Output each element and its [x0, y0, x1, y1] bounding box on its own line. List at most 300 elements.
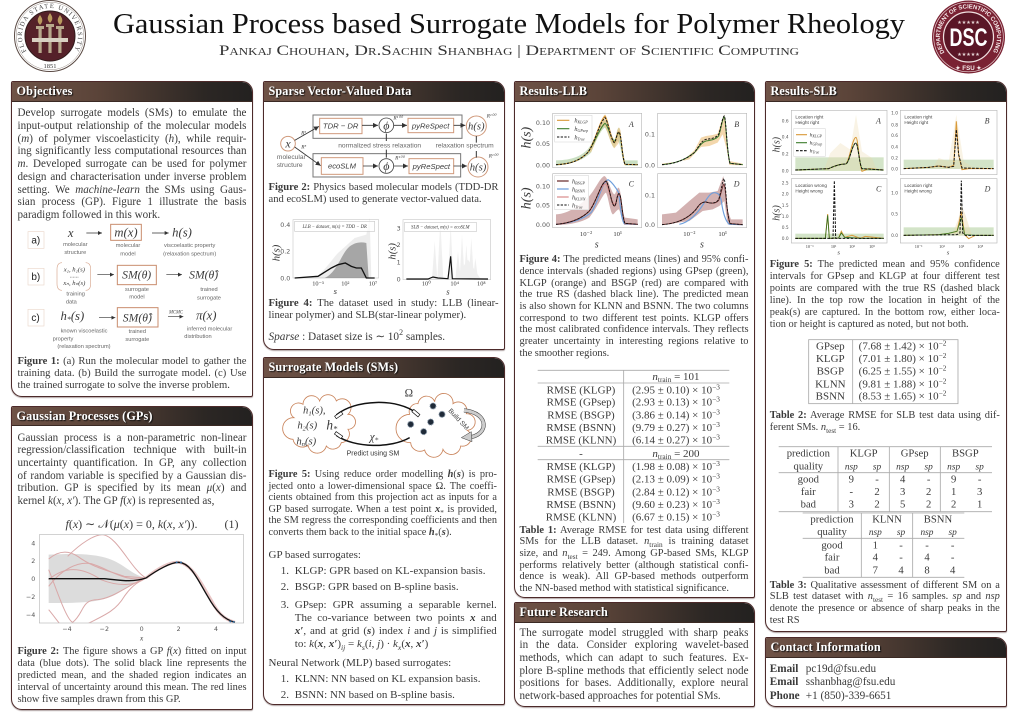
caption: figure 5 SLB: tion or height is captured as noted, but not both.	[770, 318, 969, 330]
table 3: qualitative assessment: -	[899, 552, 903, 563]
table 3: qualitative assessment: 2	[874, 499, 879, 510]
table 3: qualitative assessment: -	[950, 540, 954, 551]
figure 1: surrogate workflow diagram: structure	[64, 250, 86, 256]
figure 1: surrogate workflow diagram: model	[120, 251, 136, 257]
charts: LLB predictions A-D: 0.00	[536, 222, 550, 229]
caption: figure 2 GP: predicted mean, and the shaded region indicates an	[18, 670, 246, 680]
chart: GP fit with samples: 2	[31, 558, 35, 565]
caption: figure 5 surrogate: the SM regress the corresponding coefficients and then	[268, 515, 497, 526]
charts: SLB predictions A-D: 0.5	[781, 224, 788, 230]
charts: LLB and SLB datasets: 1	[396, 259, 400, 266]
heading: Objectives	[12, 82, 252, 102]
caption: figure 1: the trained surrogate to solve the inverse problem.	[18, 380, 230, 391]
table 1: RMSE for LLB: −3	[712, 432, 720, 441]
equation 1: f(x) ∼ 𝒩(μ(x) = 0, k(x, x′)).	[66, 516, 197, 530]
table 1: RMSE for LLB: −3	[712, 382, 720, 391]
text: kernel formula: to: k(x, x′)ij = ks(i, j) · kx(x, x′)	[295, 638, 428, 652]
caption: figure 4 LLB results: is also shown for KLNN and BSNN. The two columns	[520, 301, 748, 312]
caption: figure 4 LLB results: Figure 4: The predicted means (lines) and 95% confi-	[520, 254, 748, 265]
legend: panel A	[555, 115, 592, 142]
figure 1: surrogate workflow diagram: surrogate	[125, 337, 149, 343]
charts: LLB predictions A-D: 0.1	[645, 192, 655, 199]
text: neural network surrogates list: BSNN: NN based on B-spline basis.	[295, 689, 455, 701]
heading: Contact Information: Contact Information	[770, 640, 881, 654]
caption: figure 1: Figure 1: (a) Run the molecular model to gather the	[18, 356, 246, 366]
table 3: qualitative assessment: sp	[924, 462, 933, 472]
caption: table 1: dence is weak). All GP-based methods outperform	[520, 571, 748, 582]
chart: GP fit with samples	[26, 534, 244, 641]
charts: SLB predictions A-D: 0.0	[781, 168, 788, 174]
figure 1: surrogate workflow diagram: SM(θ̂)	[123, 311, 153, 324]
figure 1: surrogate workflow diagram: molecular	[116, 243, 140, 249]
table 3: qualitative assessment: 4	[898, 565, 904, 576]
table 3: qualitative assessment: 2	[950, 499, 956, 510]
table 1: RMSE for LLB: RMSE (BSGP)	[547, 409, 615, 421]
charts: LLB and SLB datasets: 10⁷	[368, 280, 377, 287]
figure 2: physics based molecular model pipeline: pyReSpect	[411, 162, 450, 171]
text: GP description	[18, 432, 246, 507]
charts: SLB predictions A-D: 1.5	[781, 202, 788, 208]
charts: SLB predictions A-D: 0.0	[781, 235, 788, 241]
text: future research: positions for bases. Additionally, explore neural	[520, 677, 748, 689]
heading: Results-SLB	[766, 82, 1006, 102]
table 1: RMSE for LLB: n	[653, 448, 659, 460]
table 3: qualitative assessment: 4	[899, 474, 905, 485]
figure 5: reduced order modelling clouds: (s),	[311, 406, 325, 417]
text: future research: methods, which can adapt to such features. Ex-	[520, 652, 748, 664]
legend: panel A: h	[809, 140, 812, 146]
table 3: qualitative assessment: 9	[848, 474, 853, 485]
legend: panel A: h	[574, 126, 578, 133]
logo: Department of Scientific Computing seal	[932, 0, 1005, 74]
figure 1: surrogate workflow diagram: property	[52, 336, 73, 342]
table 3: qualitative assessment: good	[797, 474, 819, 485]
table 3: qualitative assessment: nsp	[896, 462, 909, 472]
legend: panel A: GPsep	[812, 142, 822, 146]
table 2: RMSE for SLB: (9.81 ± 1.88) × 10	[858, 378, 938, 390]
table 3: qualitative assessment: 1	[950, 487, 956, 498]
caption: figure 1	[18, 356, 246, 391]
caption: figure 2 pipeline	[268, 182, 498, 205]
text: GP description: Gaussian process is a non-parametric non-linear	[18, 432, 246, 444]
logo: Department of Scientific Computing seal: ✦ FSU ✦	[955, 65, 982, 72]
figure 5: reduced order modelling clouds: *	[374, 435, 378, 444]
table 3: qualitative assessment: 1	[976, 499, 982, 510]
charts: SLB predictions A-D: Location right	[904, 114, 932, 119]
text: GP description: tribution. GP is specified by its mean μ(x) and	[18, 482, 246, 494]
figure 1: surrogate workflow diagram: SM(θ̂)	[189, 268, 219, 281]
table 3: qualitative assessment: nsp	[844, 462, 858, 472]
charts: SLB predictions A-D: 10¹	[830, 243, 837, 248]
heading: Future Research	[515, 603, 754, 622]
charts: SLB predictions A-D	[772, 110, 998, 256]
table 1: RMSE for LLB: (6.14 ± 0.27) × 10	[632, 434, 712, 446]
legend: panel A	[793, 128, 825, 156]
figure 5: reduced order modelling clouds: Ω	[404, 388, 413, 400]
panel: Results-SLB	[765, 81, 1007, 632]
text: GP based surrogates list: x′, and at grid (s) index i and j is simplified	[295, 624, 497, 636]
caption: figure 2 GP: interval of uncertainty around this mean. The red lines	[18, 682, 246, 692]
table 3: qualitative assessment: prediction	[810, 514, 854, 525]
charts: SLB predictions A-D: 0.2	[781, 151, 788, 157]
caption: figure 1: training data. (b) Build the surrogate model. (c) Use	[18, 368, 246, 379]
charts: SLB predictions A-D: B	[984, 116, 989, 125]
figure 1: surrogate workflow diagram: surrogate	[197, 295, 221, 301]
panel: Sparse Vector-Valued Data	[263, 81, 505, 350]
caption: figure 2 GP: data (blue dots). The solid black line represents the	[18, 658, 246, 668]
charts: SLB predictions A-D: 1.0	[891, 110, 898, 116]
figure 2: physics based molecular model pipeline: ecoSLM	[327, 161, 356, 170]
caption: figure 5 SLB: line). In the top row the location in height of the	[770, 294, 1000, 306]
figure 2: physics based molecular model pipeline: R¹⁰⁰	[392, 115, 403, 121]
text: GP description: regression/classification technique with built-in	[18, 444, 246, 456]
legend: panel A: GPsep	[578, 128, 588, 133]
table 3: qualitative assessment: sp	[872, 462, 881, 472]
legend: panel C: h	[572, 186, 575, 193]
chart: GP fit with samples: 0	[31, 576, 35, 583]
text: contact details: Email	[770, 676, 798, 688]
table 1: RMSE for LLB: (1.98 ± 0.08) × 10	[632, 461, 712, 473]
legend: panel C: h	[572, 194, 575, 201]
legend: panel A: h	[809, 148, 812, 154]
figure 1: surrogate workflow diagram: xₙ, hₙ(s)	[62, 280, 86, 287]
heading: Results-LLB	[515, 82, 754, 102]
charts: LLB predictions A-D: 0.05	[536, 141, 550, 148]
table 3: qualitative assessment: BSNN	[923, 514, 952, 525]
table 2: RMSE for SLB: −2	[938, 388, 946, 397]
table 2: RMSE for SLB: (7.01 ± 1.80) × 10	[858, 353, 938, 365]
charts: SLB predictions A-D: A	[874, 116, 880, 125]
table 1: RMSE for LLB: RMSE (BSGP)	[547, 486, 615, 498]
text: contact details: Email	[770, 663, 798, 675]
table 1: RMSE for LLB: (2.13 ± 0.09) × 10	[632, 473, 712, 485]
heading: Gaussian Processes: Gaussian Processes (GPs)	[16, 409, 153, 423]
caption: figure 4 LLB results: the smoother regions.	[520, 348, 609, 359]
table 1: RMSE for LLB	[538, 370, 730, 523]
figure 1: surrogate workflow diagram: h	[60, 309, 67, 323]
figure 2: physics based molecular model pipeline: molecular	[276, 154, 306, 161]
figure 1: surrogate workflow diagram: π(x)	[196, 308, 216, 322]
caption: table 3	[770, 580, 1000, 626]
figure 2: physics based molecular model pipeline: R¹⁰⁰	[394, 155, 405, 161]
caption: figure 4 dataset: Figure 4: The dataset used in study: LLB (linear-	[268, 296, 499, 308]
chart: GP fit with samples: −4	[26, 612, 35, 619]
charts: LLB and SLB datasets: 10²	[341, 280, 349, 287]
figure 1: surrogate workflow diagram: training	[66, 291, 85, 297]
table 1: RMSE for LLB: −3	[712, 484, 720, 493]
figure 5: reduced order modelling clouds: (s)	[304, 436, 316, 447]
heading: Sparse Vector-Valued Data: Sparse Vector-Valued Data	[268, 84, 411, 98]
text: objectives paragraph: (m) of polymer viscoelasticity (h), while requir-	[18, 132, 246, 144]
figure 5: reduced order modelling clouds: h	[303, 406, 308, 417]
charts: LLB and SLB datasets: 10⁴	[450, 280, 459, 287]
charts: SLB predictions A-D: Height right	[904, 119, 928, 124]
table 3: qualitative assessment: fair	[824, 552, 839, 563]
table 2: RMSE for SLB: (6.25 ± 1.55) × 10	[858, 365, 938, 377]
table 2: RMSE for SLB: GPsep	[815, 340, 845, 352]
figure 1: surrogate workflow diagram: x	[67, 226, 74, 240]
caption: figure 4 LLB results: KLGP (orange) and BSGP (red) are compared with	[520, 278, 748, 289]
caption: figure 5 SLB: Figure 5: The predicted mean and 95% confidence	[770, 258, 1000, 270]
table 3: qualitative assessment: 7	[872, 565, 878, 576]
charts: SLB predictions A-D: 0.0	[891, 232, 898, 238]
charts: SLB predictions A-D: Location right	[904, 182, 932, 187]
charts: LLB and SLB datasets: 0.2	[280, 248, 290, 255]
chart: GP fit with samples: 4	[31, 540, 35, 547]
table 1: RMSE for LLB: −3	[712, 459, 720, 468]
text: GP based surrogates list: The co-variance between two points x and	[295, 612, 497, 624]
chart: GP fit with samples: 2	[177, 626, 181, 633]
table 2: RMSE for SLB: −2	[938, 351, 946, 360]
charts: SLB predictions A-D: 10⁵	[869, 243, 875, 248]
figure 1: surrogate workflow diagram: (relaxation spectrum)	[57, 344, 111, 350]
figure 1: surrogate workflow diagram: distribution	[184, 334, 212, 340]
heading: Contact Information	[766, 638, 1006, 658]
table 1: RMSE for LLB: (9.60 ± 0.23) × 10	[632, 499, 712, 511]
figure 1: surrogate workflow diagram: trained	[200, 287, 217, 293]
charts: SLB predictions A-D: 0.0	[891, 166, 898, 172]
caption: figure 2 GP: Figure 2: The figure shows a GP f(x) fitted on input	[18, 646, 246, 656]
table 3: qualitative assessment: -	[849, 487, 853, 498]
figure 2: physics based molecular model pipeline: x	[284, 136, 291, 150]
charts: LLB and SLB datasets: h(s)	[271, 244, 282, 261]
charts: LLB and SLB datasets: 10⁻³	[312, 280, 323, 287]
table 2: RMSE for SLB: KLNN	[815, 378, 845, 390]
text: GP based surrogates list: 2.	[281, 581, 289, 593]
heading: Sparse Vector-Valued Data	[264, 82, 504, 102]
figure 1: surrogate workflow diagram: trained	[129, 329, 146, 335]
text: GP based surrogates list: KLGP: GPR based on KL-expansion basis.	[295, 565, 485, 577]
table 2: RMSE for SLB: −2	[938, 376, 946, 385]
charts: SLB predictions A-D: 0.4	[781, 134, 788, 140]
figure 5: reduced order modelling clouds: h	[296, 436, 301, 447]
caption: figure 4 LLB results: correspond to two different test points. KLGP offers	[520, 313, 748, 324]
charts: SLB predictions A-D: Location wrong	[795, 182, 827, 187]
charts: SLB predictions A-D: Height wrong	[904, 188, 932, 193]
charts: LLB and SLB datasets: LLB − dataset, m(x) = TDD − DR	[301, 224, 366, 229]
charts: LLB predictions A-D: 0.10	[536, 120, 550, 127]
table 3: qualitative assessment: 2	[925, 499, 931, 510]
charts: LLB predictions A-D: 0.00	[536, 162, 550, 169]
table 1: RMSE for LLB: = 101	[672, 371, 700, 383]
figure 5: reduced order modelling clouds: 2	[302, 425, 306, 432]
table 3: qualitative assessment: BSGP	[951, 448, 978, 459]
figure 5: reduced order modelling clouds: Build SM	[446, 408, 469, 432]
caption: figure 2 GP: show five samples drawn from this GP.	[18, 694, 181, 704]
panel: Objectives	[11, 81, 253, 397]
table 1: RMSE for LLB: −3	[712, 407, 720, 416]
legend: panel A: KLGP	[811, 134, 822, 138]
text: future research: network-based approaches for potential SMs.	[520, 690, 721, 702]
table 3: qualitative assessment: quality	[817, 526, 847, 537]
figure 1: surrogate workflow diagram	[28, 224, 232, 350]
charts: LLB predictions A-D: 0.0	[645, 222, 655, 229]
table 3: qualitative assessment: KLNN	[872, 514, 902, 525]
figure 2: physics based molecular model pipeline: TDR − DR	[322, 121, 358, 130]
table 3: qualitative assessment: -	[925, 540, 929, 551]
title: Gaussian Process based Surrogate Models for Polymer Rheology	[113, 9, 905, 40]
figure 5: reduced order modelling clouds: Predict using SM	[346, 451, 399, 458]
panel: Surrogate Models	[263, 357, 505, 705]
text: future research: in the data. Consider exploring wavelet-based	[520, 639, 748, 651]
table 3: qualitative assessment: prediction	[786, 448, 830, 459]
caption: table 3: denote the presence or absence of sharp peaks in the	[770, 603, 1000, 614]
figure 1: surrogate workflow diagram: h(s)	[172, 225, 192, 239]
table 1: RMSE for LLB: train	[658, 375, 672, 384]
figure 1: surrogate workflow diagram: model	[129, 294, 145, 300]
caption: figure 5 surrogate: GP based surrogate. When a test point x* is provided,	[268, 504, 497, 517]
caption: figure 5 SLB: peak(s) are captured. In the bottom row, either loca-	[770, 306, 1000, 318]
charts: SLB predictions A-D: Location right	[795, 114, 823, 119]
charts: LLB predictions A-D: 10⁻²	[580, 231, 592, 238]
charts: SLB predictions A-D: 0.2	[891, 155, 898, 161]
heading: Surrogate Models	[264, 358, 504, 378]
text: contact details	[770, 663, 896, 702]
legend: panel C: KLNN	[574, 196, 586, 201]
table 2: RMSE for SLB: (7.68 ± 1.42) × 10	[858, 340, 938, 352]
figure 1: surrogate workflow diagram: inferred molecular	[187, 326, 232, 332]
caption: figure 5 surrogate: Figure 5: Using reduce order modelling h(s) is pro-	[268, 469, 497, 480]
legend: panel A: h	[574, 134, 578, 141]
table 1: RMSE for LLB: n	[653, 371, 659, 383]
table 1: RMSE for LLB: (2.93 ± 0.13) × 10	[632, 396, 712, 408]
table 3: qualitative assessment: 3	[976, 487, 982, 498]
figure 1: surrogate workflow diagram: x₁, h₁(s)	[63, 266, 86, 273]
charts: SLB predictions A-D: 10³	[958, 243, 964, 248]
caption: table 2: ferent SMs. ntest = 16.	[770, 422, 860, 435]
charts: SLB predictions A-D: 10¹	[939, 243, 945, 248]
table 3: qualitative assessment: -	[950, 552, 954, 563]
table 3: qualitative assessment	[778, 446, 992, 578]
heading: Results-SLB: Results-SLB	[770, 84, 837, 98]
panel: Future Research	[514, 602, 755, 707]
logo: Florida State University seal: FLORIDA STATE UNIVERSITY	[18, 4, 82, 54]
caption: figure 4 dataset: linear polymer) and SLB(star-linear polymer).	[268, 308, 466, 320]
table 1: RMSE for LLB: train	[658, 452, 672, 461]
table 2: RMSE for SLB: BSGP	[816, 365, 844, 377]
equation 1: (1)	[224, 516, 238, 530]
charts: LLB predictions A-D: 0.10	[536, 183, 550, 190]
figure 1: surrogate workflow diagram: *	[67, 315, 71, 324]
table 1: RMSE for LLB: RMSE (KLGP)	[547, 461, 616, 473]
caption: figure 4 LLB results: the most calibrated confidence intervals. They reflects	[520, 324, 748, 335]
figure 1: surrogate workflow diagram: known viscoelastic	[60, 328, 107, 334]
charts: LLB and SLB datasets: SLB − dataset, m(x) = ecoSLM	[411, 225, 470, 230]
text: objectives paragraph: input-output relationship of the molecular models	[18, 120, 246, 132]
table 3: qualitative assessment: sp	[948, 527, 957, 537]
caption: figure 5 surrogate: cients obtained from this projection act as inputs for a	[268, 492, 497, 503]
figure 5: reduced order modelling clouds: h	[297, 421, 302, 432]
text: GP based surrogates list: BSGP: GPR based on B-spline basis.	[295, 581, 459, 593]
figure 2: physics based molecular model pipeline: R¹⁰⁰	[485, 113, 496, 119]
logo: Florida State University seal	[14, 0, 86, 72]
charts: LLB predictions A-D: D	[733, 179, 740, 188]
charts: LLB and SLB datasets: 10⁰	[421, 280, 431, 287]
text: objectives paragraph: Develop surrogate models (SMs) to emulate the	[18, 107, 246, 119]
table 1: RMSE for LLB: RMSE (BSNN)	[547, 499, 616, 511]
chart: GP fit with samples: −2	[100, 626, 109, 633]
chart: GP fit with samples: −4	[62, 626, 72, 633]
charts: LLB and SLB datasets: 2	[396, 241, 400, 248]
caption: figure 2 pipeline: Figure 2: Physics based molecular models (TDD-DR	[268, 182, 498, 193]
text: GP description: uncertainty quantification. In GP, any collection	[18, 457, 246, 469]
table 3: qualitative assessment: nsp	[868, 527, 882, 537]
legend: panel C: BSGP	[575, 180, 586, 185]
figure 1: surrogate workflow diagram: a)	[31, 235, 40, 246]
table 1: RMSE for LLB: = 200	[672, 448, 700, 460]
table 3: qualitative assessment: bad	[800, 499, 816, 510]
charts: SLB predictions A-D: 0.6	[781, 118, 788, 124]
table 1: RMSE for LLB: −3	[712, 394, 720, 403]
charts: SLB predictions A-D: 2.5	[781, 180, 788, 186]
figure 5: reduced order modelling clouds: 1	[308, 410, 311, 417]
charts: LLB predictions A-D: 0.1	[645, 131, 655, 138]
figure 2: physics based molecular model pipeline: ϕ	[383, 159, 389, 173]
table 3: qualitative assessment: 4	[924, 552, 930, 563]
table 3: qualitative assessment: quality	[793, 461, 823, 472]
text: GP based surrogates list: GP based surrogates:	[268, 548, 361, 560]
text: objectives paragraph: design and characterisation under inverse problem	[18, 171, 246, 183]
figure 1: surrogate workflow diagram: (s)	[71, 309, 84, 323]
caption: figure 4 LLB results: greater uncertainty in interesting regions relative to	[520, 336, 748, 347]
text: GP based surrogates list: 1.	[281, 565, 289, 577]
logo: Department of Scientific Computing seal: DEPARTMENT OF SCIENTIFIC COMPUTING	[936, 4, 1002, 54]
charts: SLB predictions A-D: Height wrong	[795, 188, 823, 193]
figure 1: surrogate workflow diagram: ......	[70, 273, 79, 279]
charts: SLB predictions A-D: 2.0	[781, 191, 788, 197]
figure 2: physics based molecular model pipeline: h(s)	[469, 162, 486, 173]
text: objectives paragraph: paradigm followed in this work.	[18, 209, 160, 221]
figure 1: surrogate workflow diagram: c)	[31, 313, 39, 324]
figure 1: surrogate workflow diagram: SM(θ)	[122, 268, 151, 281]
heading: Future Research: Future Research	[520, 605, 608, 619]
figure 2: physics based molecular model pipeline	[276, 113, 498, 178]
text: future research: The surrogate model struggled with sharp peaks	[520, 626, 748, 638]
caption: figure 4 LLB results	[520, 254, 748, 359]
heading: Results-LLB: Results-LLB	[520, 84, 587, 98]
text: GP based surrogates list	[268, 548, 497, 636]
chart: GP fit with samples: −2	[26, 594, 35, 601]
text: objectives paragraph: sian process (GP). Figure 1 illustrate the basis	[18, 196, 246, 208]
table 3: qualitative assessment: 8	[924, 565, 929, 576]
table 3: qualitative assessment: -	[899, 540, 903, 551]
legend: panel C: h	[572, 178, 575, 185]
figure 5: reduced order modelling clouds: χ	[369, 431, 374, 443]
text: neural network surrogates list: 2.	[281, 689, 289, 701]
logo: Florida State University seal: 1851	[44, 63, 56, 70]
table 3: qualitative assessment: 5	[899, 499, 905, 510]
caption: figure 4 LLB results: dence intervals (shaded regions) using GPsep (green),	[520, 266, 748, 277]
caption: table 1: the NN-based method with statistical significance.	[520, 583, 729, 594]
table 3: qualitative assessment: 9	[950, 474, 956, 485]
text: future research: plore B-spline methods that efficiently select node	[520, 665, 748, 677]
table 2: RMSE for SLB: −2	[938, 363, 946, 372]
figure 1: surrogate workflow diagram: (relaxation spectrum)	[163, 251, 216, 257]
table 3: qualitative assessment: GPsep	[900, 448, 928, 459]
legend: panel C: BSNN	[575, 188, 585, 193]
charts: LLB predictions A-D: 0.0	[645, 162, 655, 169]
legend: panel A: True	[812, 150, 819, 154]
caption: table 1	[520, 525, 749, 594]
legend: panel A: h	[574, 117, 578, 124]
legend: panel A: h	[809, 132, 812, 138]
table 1: RMSE for LLB: (9.79 ± 0.27) × 10	[632, 422, 712, 434]
author line: Pankaj Chouhan, Dr.Sachin Shanbhag | Department of Scientific Computing	[219, 43, 799, 59]
text: contact details: pc19d@fsu.edu	[806, 663, 876, 675]
legend: panel C: h	[572, 202, 575, 209]
text: future research	[520, 626, 748, 702]
text: contact details: +1 (850)-339-6651	[806, 690, 891, 702]
